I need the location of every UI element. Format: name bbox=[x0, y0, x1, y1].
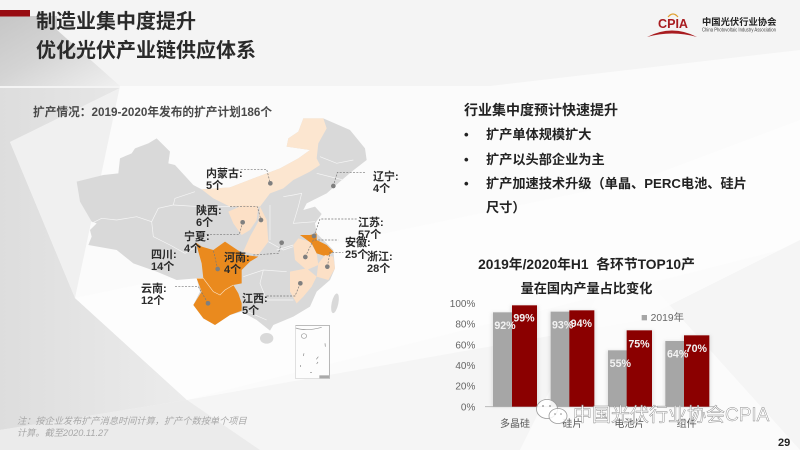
group: wafer: 93% bbox=[552, 319, 574, 331]
page number: 29 bbox=[778, 437, 790, 449]
Jiangsu bbox=[300, 233, 333, 257]
group: module: 70% bbox=[686, 343, 708, 355]
footnote: 注：按企业发布扩产消息时间计算，扩产个数按单个项目 bbox=[17, 416, 247, 426]
footnote bbox=[17, 416, 247, 438]
bullet 3: • bbox=[464, 176, 469, 191]
Taiwan bbox=[330, 293, 340, 314]
Anhui label: 25个 bbox=[345, 248, 368, 261]
legend: 2019年 bbox=[651, 311, 684, 324]
province borders bbox=[92, 157, 353, 320]
Inner Mongolia label: 5个 bbox=[206, 179, 223, 192]
Jiangxi bbox=[290, 268, 317, 303]
bullet 2: 扩产以头部企业为主 bbox=[486, 151, 605, 167]
map of China bbox=[77, 118, 367, 379]
Yunnan bbox=[193, 278, 242, 325]
title line 1: 制造业集中度提升 bbox=[36, 10, 196, 33]
Inner Mongolia bbox=[202, 118, 327, 207]
map heading: 扩产情况：2019-2020年发布的扩产计划186个 bbox=[33, 105, 272, 119]
Yunnan label: 云南: bbox=[141, 282, 167, 295]
Anhui bbox=[293, 238, 318, 270]
y axis labels: 100% bbox=[450, 299, 475, 310]
Ningxia bbox=[228, 205, 258, 235]
logo: CPIA: China Photovoltaic Industry Association bbox=[702, 28, 776, 34]
group: cell: 75% bbox=[628, 338, 650, 350]
Jiangxi label: 江西: bbox=[242, 292, 268, 305]
category labels: 硅片 bbox=[562, 417, 582, 430]
title line 2: 优化光伏产业链供应体系 bbox=[36, 38, 256, 62]
Ningxia label: 宁夏: bbox=[184, 229, 210, 243]
bar chart bbox=[450, 299, 717, 430]
Liaoning label: 辽宁: bbox=[373, 169, 399, 183]
group: cell bbox=[608, 330, 652, 407]
title accent: red bar bbox=[0, 10, 30, 16]
province labels bbox=[141, 166, 399, 317]
legend bbox=[642, 311, 684, 324]
logo: CPIA: CPIA bbox=[658, 16, 689, 31]
y axis labels: 80% bbox=[455, 320, 475, 331]
Inner Mongolia label: 内蒙古: bbox=[206, 166, 243, 180]
bullet 2: • bbox=[464, 152, 469, 167]
key points bbox=[464, 102, 747, 215]
key points heading: 行业集中度预计快速提升 bbox=[464, 102, 618, 118]
leader lines bbox=[175, 169, 365, 303]
category labels: 多晶硅 bbox=[500, 417, 530, 430]
group: polysilicon: 99% bbox=[513, 313, 535, 325]
Jiangxi label: 5个 bbox=[242, 304, 259, 317]
Sichuan label: 14个 bbox=[151, 260, 174, 273]
location dots bbox=[206, 181, 336, 306]
bullet 1: • bbox=[464, 127, 469, 142]
watermark: 中国光伏行业协会CPIA bbox=[573, 404, 770, 426]
group: polysilicon: 92% bbox=[494, 320, 516, 332]
chart title: 2019年/2020年H1 各环节TOP10产 bbox=[478, 256, 695, 272]
axis line bbox=[485, 405, 717, 408]
Zhejiang bbox=[317, 255, 335, 280]
group: cell: 55% bbox=[610, 358, 632, 370]
Shaanxi label: 陕西: bbox=[196, 203, 222, 217]
Anhui label: 安徽: bbox=[345, 235, 371, 249]
Ningxia label: 4个 bbox=[184, 242, 201, 255]
bullet 3: 扩产加速技术升级（单晶、PERC电池、硅片 bbox=[486, 175, 747, 191]
bullet 3 continuation: 尺寸） bbox=[486, 199, 526, 215]
Sichuan bbox=[196, 242, 258, 295]
bar shadow bbox=[492, 305, 711, 407]
Henan label: 4个 bbox=[224, 263, 241, 276]
country base bbox=[77, 118, 367, 331]
chart title bbox=[478, 256, 695, 296]
logo: CPIA bbox=[647, 14, 777, 37]
WeChat icon bbox=[536, 400, 567, 424]
logo: CPIA: 中国光伏行业协会 bbox=[702, 16, 777, 27]
watermark bbox=[536, 400, 770, 426]
South China Sea inset bbox=[296, 325, 329, 379]
group: module: 64% bbox=[667, 349, 689, 361]
category labels: 电池片 bbox=[614, 417, 644, 430]
footnote: 计算。截至2020.11.27 bbox=[17, 428, 109, 438]
y axis labels: 0% bbox=[461, 402, 475, 413]
group: wafer: 94% bbox=[571, 318, 593, 330]
Henan label: 河南: bbox=[224, 251, 250, 264]
Liaoning label: 4个 bbox=[373, 182, 390, 195]
Jiangsu label: 江苏: bbox=[358, 215, 384, 229]
y axis labels: 20% bbox=[455, 382, 475, 393]
Shaanxi bbox=[243, 207, 268, 255]
category labels: 组件 bbox=[677, 417, 697, 430]
y axis labels bbox=[450, 299, 475, 413]
Hainan bbox=[260, 333, 273, 344]
group: wafer bbox=[551, 310, 594, 407]
Zhejiang label: 28个 bbox=[367, 262, 390, 275]
group: module bbox=[665, 335, 709, 407]
bullet 1: 扩产单体规模扩大 bbox=[486, 126, 592, 142]
y axis labels: 40% bbox=[455, 361, 475, 372]
Zhejiang label: 浙江: bbox=[367, 249, 393, 263]
Jiangsu label: 57个 bbox=[358, 228, 381, 241]
group: polysilicon bbox=[493, 305, 537, 407]
category labels bbox=[500, 417, 697, 430]
Yunnan label: 12个 bbox=[141, 294, 164, 307]
Sichuan label: 四川: bbox=[151, 249, 177, 261]
title accent: grey wedge bbox=[0, 16, 120, 86]
y axis labels: 60% bbox=[455, 340, 475, 351]
chart title: 量在国内产量占比变化 bbox=[521, 280, 652, 296]
Shaanxi label: 6个 bbox=[196, 216, 213, 229]
